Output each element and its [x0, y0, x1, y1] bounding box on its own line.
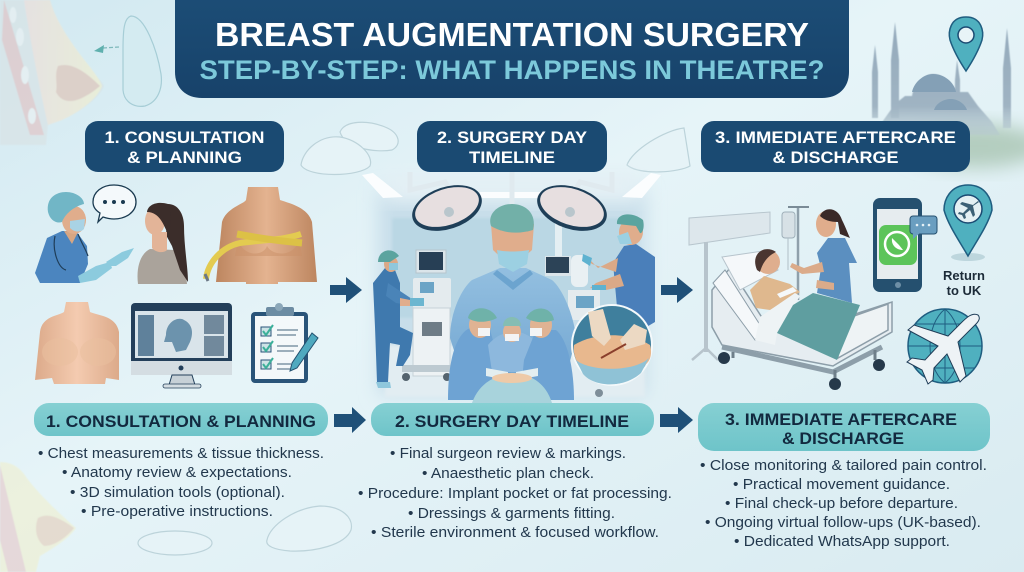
illustration: breast anatomy top left [0, 0, 104, 145]
patient [750, 249, 800, 310]
left nurse [373, 250, 424, 388]
label: return to UK [943, 268, 985, 298]
speech bubble [93, 185, 136, 222]
assisting surgeons [448, 308, 574, 403]
text block: step 2 bullets: • Dressings & garments fitting. [408, 506, 615, 522]
arrow: step 2 to 3 upper [661, 277, 693, 303]
badge: step 2: TIMELINE [469, 148, 555, 167]
nurse at bedside [790, 209, 857, 303]
icon: torso with measuring tape [205, 187, 317, 284]
pole [692, 242, 718, 360]
text block: step 3 bullets: • Practical movement guidance. [733, 477, 950, 493]
illustration: implant with arrow [94, 16, 161, 106]
text block: step 1 bullets: • Chest measurements & tissue thickness. [38, 446, 324, 462]
illustration: faded breast anatomy bottom left [0, 462, 76, 572]
IV drip stand [782, 207, 809, 300]
WhatsApp tile [879, 225, 917, 265]
badge: step 1 [85, 121, 284, 172]
right machine [545, 255, 603, 397]
bar: step 1 heading [34, 403, 328, 436]
text block: step 2 bullets: • Anaesthetic plan check. [422, 466, 594, 482]
chat bubble [910, 216, 937, 239]
text block: step 2 bullets: • Final surgeon review & markings. [390, 446, 626, 462]
badge: step 3: 3. IMMEDIATE AFTERCARE [715, 128, 956, 147]
text block: step 2 bullets: • Procedure: Implant pocket or fat processing. [358, 486, 672, 502]
text block: step 2 bullets [358, 446, 672, 541]
floating implants [138, 122, 690, 555]
bar: step 3 heading: 3. IMMEDIATE AFTERCARE [725, 410, 957, 429]
bed [712, 268, 892, 390]
text block: step 3 bullets: • Ongoing virtual follow-ups (UK-based). [705, 515, 981, 531]
icon: globe with plane [907, 309, 982, 384]
icon: location pin top right [949, 17, 983, 71]
lead surgeon [450, 204, 576, 400]
wall panel [689, 212, 770, 245]
text block: step 3 bullets: • Close monitoring & tailored pain control. [700, 458, 987, 474]
icon: phone with WhatsApp [873, 198, 937, 292]
icon: monitor with 3D head simulation [131, 303, 232, 388]
arrow: step 1 to 2 lower [334, 407, 366, 433]
text block: step 1 bullets: • 3D simulation tools (optional). [70, 485, 285, 501]
text block: step 3 bullets: • Final check-up before departure. [725, 496, 958, 512]
icon: plane location pin [944, 185, 992, 261]
arrow: step 1 to 2 upper [330, 277, 362, 303]
icon: clipboard checklist [251, 303, 318, 383]
surgical lamps [406, 172, 613, 239]
theatre room [362, 172, 661, 397]
text block: step 1 bullets [38, 446, 324, 520]
badge: step 1: & PLANNING [127, 148, 242, 167]
bar: step 3 heading: & DISCHARGE [782, 429, 904, 448]
text block: step 3 bullets [700, 458, 987, 550]
title: BREAST AUGMENTATION SURGERY [215, 16, 809, 53]
illustration: operating theatre scene [362, 172, 661, 403]
right nurse [582, 214, 655, 332]
inset: incision close-up [572, 305, 652, 385]
bar: step 2 heading: 2. SURGERY DAY TIMELINE [395, 412, 629, 431]
icon: front torso [35, 302, 119, 384]
bar: step 1 heading: 1. CONSULTATION & PLANNING [46, 412, 316, 431]
arrow: step 2 to 3 lower [660, 407, 693, 433]
anaesthesia machine [402, 250, 452, 381]
badge: step 3: & DISCHARGE [772, 148, 898, 167]
pillow [722, 250, 778, 290]
subtitle: STEP-BY-STEP: WHAT HAPPENS IN THEATRE? [200, 55, 824, 85]
icon: nurse consulting patient [35, 185, 188, 284]
badge: step 2: 2. SURGERY DAY [437, 128, 588, 147]
text block: step 3 bullets: • Dedicated WhatsApp support. [734, 534, 950, 550]
nurse [35, 192, 134, 283]
text block: step 2 bullets: • Sterile environment & focused workflow. [371, 525, 659, 541]
badge: step 3 [701, 121, 970, 172]
badge: step 1: 1. CONSULTATION [104, 128, 264, 147]
label: return to UK: to UK [947, 283, 982, 298]
patient [138, 203, 188, 284]
title panel [175, 0, 849, 98]
bar: step 2 heading [371, 403, 654, 436]
blanket [755, 293, 860, 360]
text block: step 1 bullets: • Pre-operative instructions. [81, 504, 273, 520]
label: return to UK: Return [943, 268, 985, 283]
text block: step 1 bullets: • Anatomy review & expectations. [62, 465, 292, 481]
illustration: Istanbul mosque skyline [872, 22, 1024, 168]
bar: step 3 heading [698, 403, 990, 451]
badge: step 2 [417, 121, 607, 172]
illustration: patient in hospital bed with nurse [689, 207, 892, 390]
